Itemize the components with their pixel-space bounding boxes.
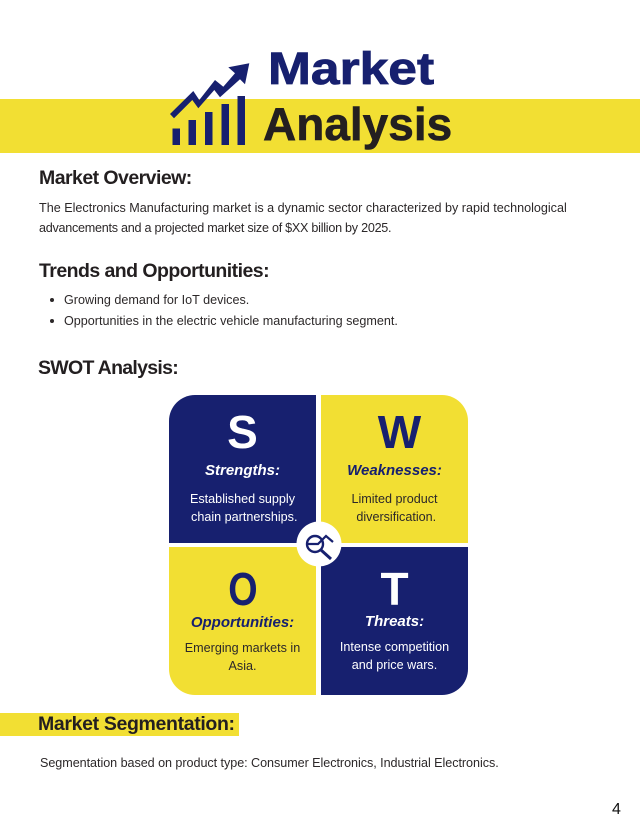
text: market overview body: The Electronics Manufacturing market is a dynamic sector characterized by rapid technological: [39, 201, 567, 215]
quadrant: threats: T: [380, 563, 409, 615]
quadrant: threats: Intense competition: [340, 640, 449, 654]
heading: market overview: Market Overview:: [39, 167, 192, 189]
quadrant: weaknesses: W: [378, 406, 421, 458]
quadrant: threats: Threats:: [365, 613, 424, 630]
icon: magnifier badge: [296, 522, 342, 566]
quadrant: strengths: Strengths:: [205, 462, 280, 479]
quadrant: weaknesses: [321, 395, 468, 543]
quadrant: strengths: S: [227, 406, 258, 458]
list: trends: [50, 293, 398, 328]
text: market overview body: [39, 201, 567, 235]
quadrant: threats: [321, 547, 468, 695]
quadrant: strengths: Established supply: [190, 492, 295, 506]
page number: 4: [612, 801, 621, 818]
icon: rising chart: [170, 63, 250, 145]
panel: SWOT matrix: [169, 395, 468, 695]
quadrant: strengths: [169, 395, 316, 543]
list: trends: Opportunities in the electric vehicle manufacturing segment.: [64, 314, 398, 328]
quadrant: opportunities: O: [228, 563, 257, 615]
quadrant: opportunities: Asia.: [228, 659, 256, 673]
quadrant: weaknesses: Weaknesses:: [347, 462, 442, 479]
heading: SWOT analysis: SWOT Analysis:: [38, 357, 178, 379]
quadrant: weaknesses: Limited product: [351, 492, 438, 506]
quadrant: opportunities: Opportunities:: [191, 614, 294, 631]
heading: trends and opportunities: Trends and Opportunities:: [39, 260, 269, 282]
quadrant: strengths: chain partnerships.: [191, 510, 297, 524]
title: Market: Market: [268, 43, 434, 94]
title banner: [0, 99, 640, 153]
quadrant: threats: and price wars.: [352, 658, 437, 672]
text: market overview body: advancements and a projected market size of $XX billion by 2025.: [39, 221, 391, 235]
text: segmentation body: Segmentation based on product type: Consumer Electronics, Industrial Electronics.: [40, 756, 499, 770]
quadrant: opportunities: [169, 547, 316, 695]
list: trends: Growing demand for IoT devices.: [64, 293, 249, 307]
heading: market segmentation with highlight: Market Segmentation:: [38, 713, 235, 735]
quadrant: weaknesses: diversification.: [356, 510, 436, 524]
title: Analysis: Analysis: [263, 98, 452, 150]
quadrant: opportunities: Emerging markets in: [185, 641, 300, 655]
